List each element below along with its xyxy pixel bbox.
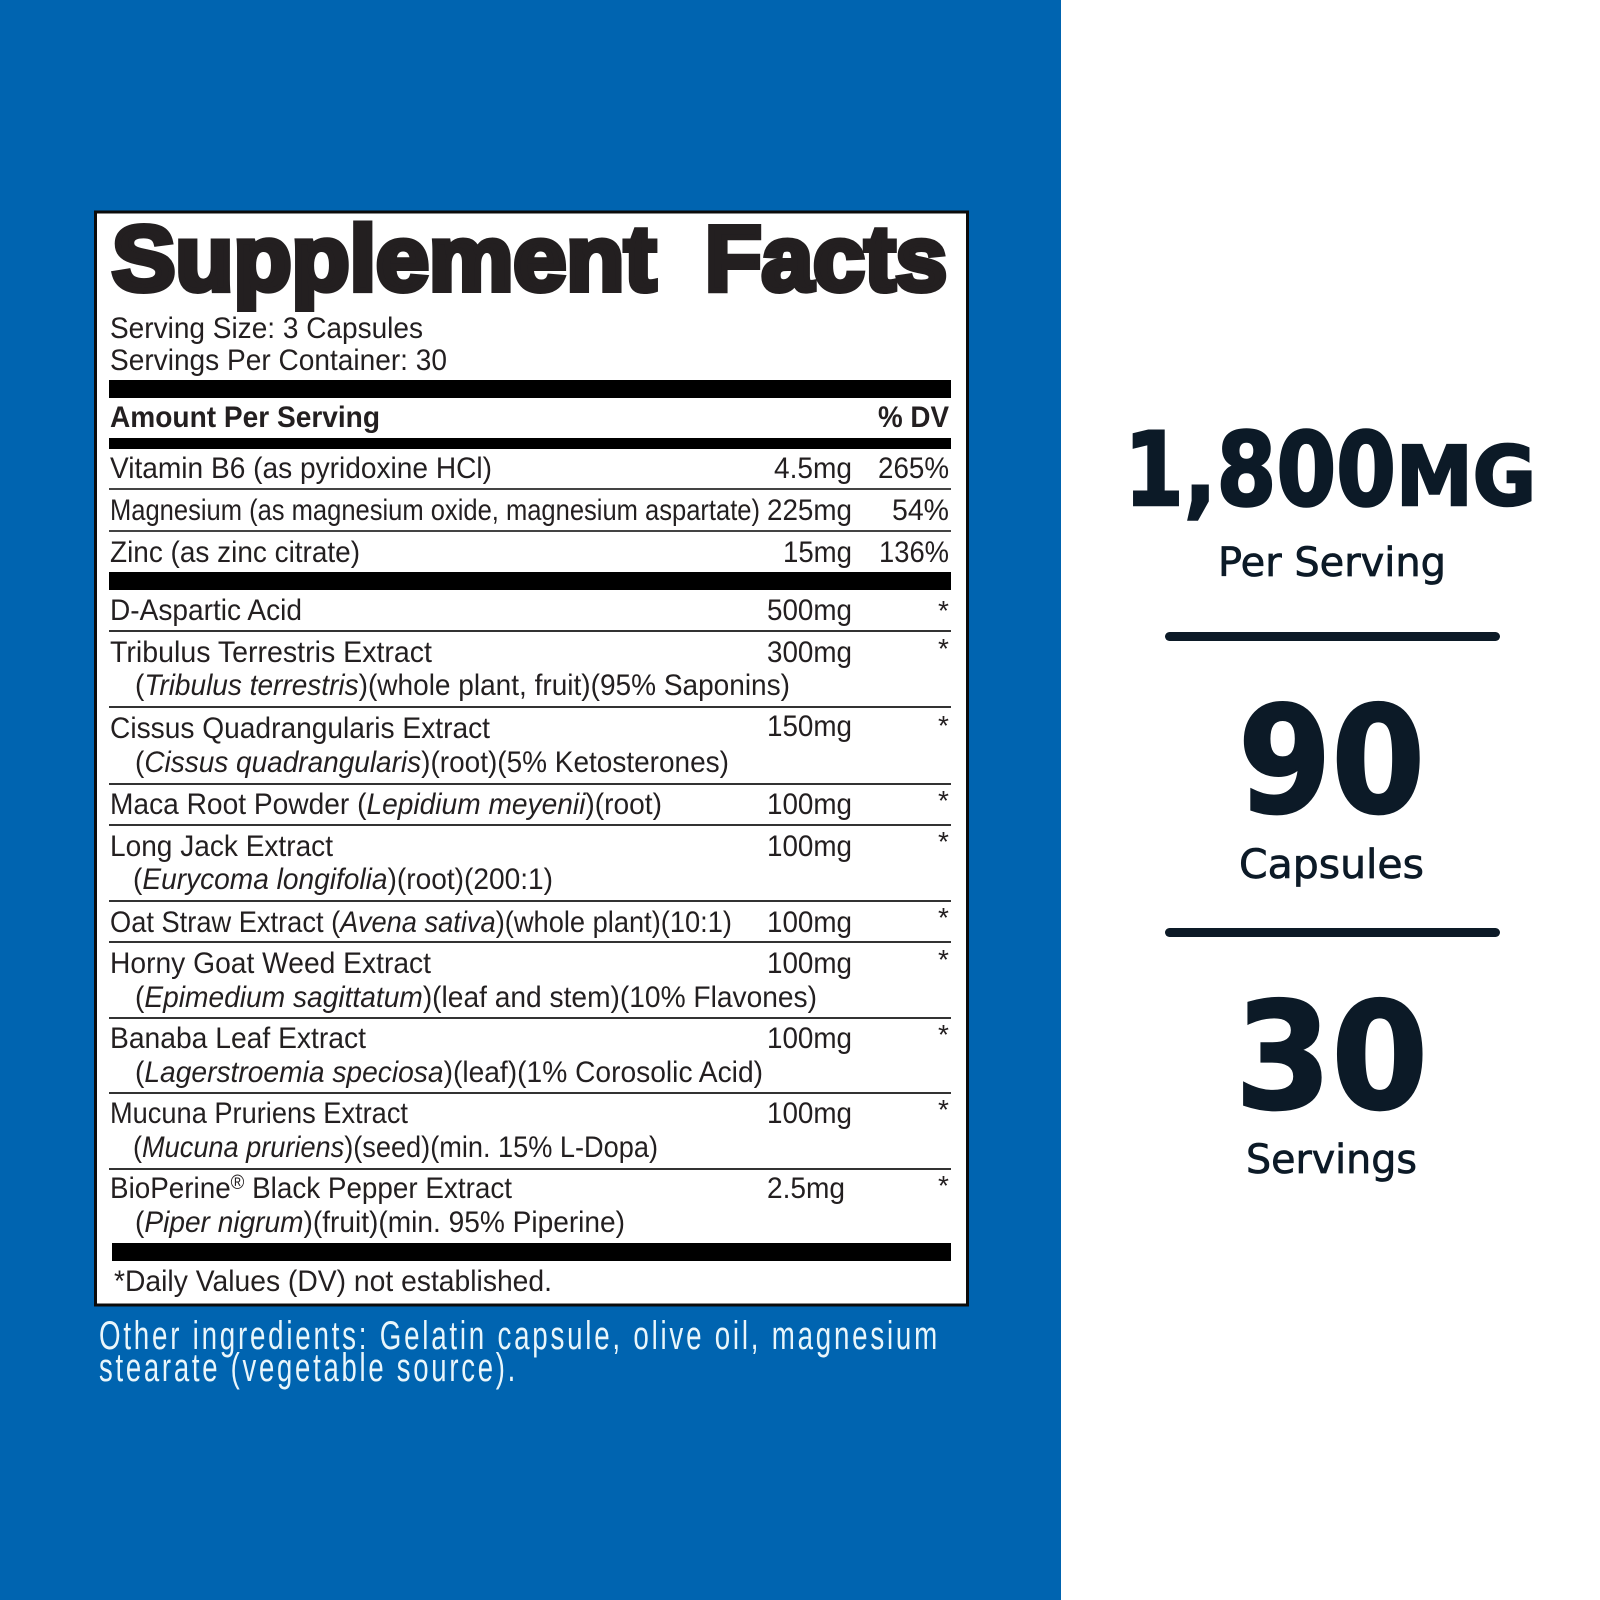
row: maca root powder: 100mg (767, 788, 852, 821)
row: d-aspartic acid: D-Aspartic Acid (110, 594, 302, 627)
serving information: Servings Per Container: 30 (110, 344, 447, 377)
row: bioperine black pepper extract: Black Pepper Extract (244, 1172, 513, 1205)
row: horny goat weed extract: 100mg (767, 947, 852, 980)
stat: 30 servings: Servings (1246, 1137, 1417, 1183)
row: long jack extract: (Eurycoma longifolia)(root)(200:1) (133, 863, 553, 896)
row: banaba leaf extract: * (938, 1019, 949, 1050)
row: cissus quadrangularis: * (938, 710, 949, 741)
row: horny goat weed extract (110, 944, 949, 1014)
row: d-aspartic acid: 500mg (767, 594, 852, 627)
row: tribulus terrestris: 300mg (767, 636, 852, 669)
blue background panel (0, 0, 1061, 1600)
row: long jack extract: Long Jack Extract (110, 830, 334, 863)
row: vitamin b6: 265% (878, 452, 949, 485)
row: oat straw extract: Oat Straw Extract (Avena sativa)(whole plant)(10:1) (110, 906, 732, 939)
other ingredients text (99, 1314, 940, 1390)
row: magnesium: 54% (892, 494, 949, 527)
row: oat straw extract (110, 902, 949, 939)
row: mucuna pruriens extract (110, 1094, 949, 1164)
row: tribulus terrestris (110, 633, 949, 702)
row: zinc (110, 536, 949, 569)
row: magnesium: Magnesium (as magnesium oxide, magnesium aspartate) (110, 494, 760, 527)
stat: 90 capsules: 90 (1238, 675, 1425, 847)
row: bioperine black pepper extract: ® (231, 1172, 245, 1194)
row: long jack extract: * (938, 826, 949, 857)
row: mucuna pruriens extract: 100mg (767, 1097, 852, 1130)
row: cissus quadrangularis: 150mg (767, 710, 852, 743)
row: mucuna pruriens extract: Mucuna Pruriens Extract (110, 1097, 409, 1130)
row: zinc: 136% (879, 536, 949, 569)
row: vitamin b6 (110, 452, 949, 485)
other ingredients text: Other ingredients: Gelatin capsule, olive oil, magnesium (99, 1314, 940, 1358)
stat: 1,800mg per serving (1124, 411, 1536, 586)
row: long jack extract (110, 826, 949, 896)
title (112, 208, 947, 310)
row: bioperine black pepper extract: (Piper nigrum)(fruit)(min. 95% Piperine) (135, 1206, 625, 1239)
row: vitamin b6: 4.5mg (774, 452, 852, 485)
row: bioperine black pepper extract: 2.5mg (767, 1172, 845, 1205)
row: horny goat weed extract: * (938, 944, 949, 975)
serving information: Serving Size: 3 Capsules (110, 312, 423, 345)
row: banaba leaf extract: 100mg (767, 1022, 852, 1055)
row: banaba leaf extract: Banaba Leaf Extract (110, 1022, 367, 1055)
other ingredients text: stearate (vegetable source). (99, 1346, 518, 1390)
footnote: *Daily Values (DV) not established. (114, 1265, 552, 1298)
row: oat straw extract: * (938, 902, 949, 933)
row: banaba leaf extract: (Lagerstroemia speciosa)(leaf)(1% Corosolic Acid) (135, 1056, 763, 1089)
stat: 1,800mg per serving: MG (1396, 430, 1536, 525)
title: Facts (705, 208, 947, 310)
row: maca root powder: * (938, 785, 949, 816)
row: oat straw extract: 100mg (767, 906, 852, 939)
table header: Amount Per Serving (110, 401, 380, 434)
row: bioperine black pepper extract (110, 1170, 949, 1239)
stat: 1,800mg per serving: Per Serving (1218, 540, 1446, 586)
table header: % DV (878, 401, 949, 434)
row: tribulus terrestris: Tribulus Terrestris Extract (110, 636, 433, 669)
row: d-aspartic acid: * (938, 595, 949, 626)
row: zinc: 15mg (783, 536, 852, 569)
row: vitamin b6: Vitamin B6 (as pyridoxine HCl) (110, 452, 492, 485)
stat: 90 capsules: Capsules (1239, 842, 1424, 888)
row: cissus quadrangularis (110, 710, 949, 779)
panel: supplement facts label (96, 208, 968, 1305)
stat: 30 servings: 30 (1235, 971, 1428, 1143)
stat: 1,800mg per serving: 1,800 (1124, 411, 1396, 530)
row: d-aspartic acid (110, 594, 949, 627)
row: maca root powder: Maca Root Powder (Lepidium meyenii)(root) (110, 788, 662, 821)
row: mucuna pruriens extract: (Mucuna pruriens)(seed)(min. 15% L-Dopa) (133, 1131, 658, 1164)
row: zinc: Zinc (as zinc citrate) (110, 536, 360, 569)
row: tribulus terrestris: * (938, 633, 949, 664)
row: mucuna pruriens extract: * (938, 1094, 949, 1125)
row: maca root powder (110, 785, 949, 821)
row: bioperine black pepper extract: * (938, 1170, 949, 1201)
row: tribulus terrestris: (Tribulus terrestris)(whole plant, fruit)(95% Saponins) (135, 669, 790, 702)
row: magnesium: 225mg (767, 494, 852, 527)
row: bioperine black pepper extract: BioPerine (110, 1172, 240, 1205)
row: horny goat weed extract: (Epimedium sagittatum)(leaf and stem)(10% Flavones) (135, 981, 817, 1014)
row: banaba leaf extract (110, 1019, 949, 1089)
title: Supplement (112, 208, 656, 310)
table header (110, 401, 949, 434)
row: long jack extract: 100mg (767, 830, 852, 863)
row: cissus quadrangularis: (Cissus quadrangularis)(root)(5% Ketosterones) (135, 746, 729, 779)
serving information (110, 312, 447, 377)
row: horny goat weed extract: Horny Goat Weed Extract (110, 947, 432, 980)
row: cissus quadrangularis: Cissus Quadrangularis Extract (110, 712, 491, 745)
